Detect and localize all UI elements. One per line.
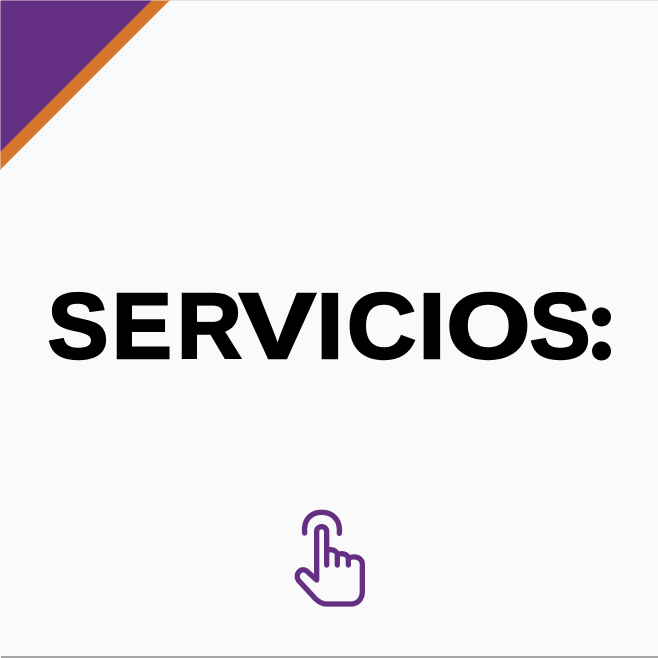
corner ribbon: purple and orange triangle bbox=[0, 0, 170, 170]
title: R bbox=[177, 274, 242, 378]
title: I bbox=[418, 274, 445, 378]
title: E bbox=[112, 274, 172, 378]
title: I bbox=[316, 274, 343, 378]
title: S bbox=[530, 274, 590, 378]
title: O bbox=[446, 274, 531, 378]
title: C bbox=[347, 274, 416, 378]
title bbox=[48, 274, 616, 378]
icon: pointing hand tap bbox=[297, 512, 362, 604]
title: V bbox=[239, 274, 316, 378]
title: : bbox=[586, 277, 616, 377]
title: S bbox=[48, 274, 108, 378]
